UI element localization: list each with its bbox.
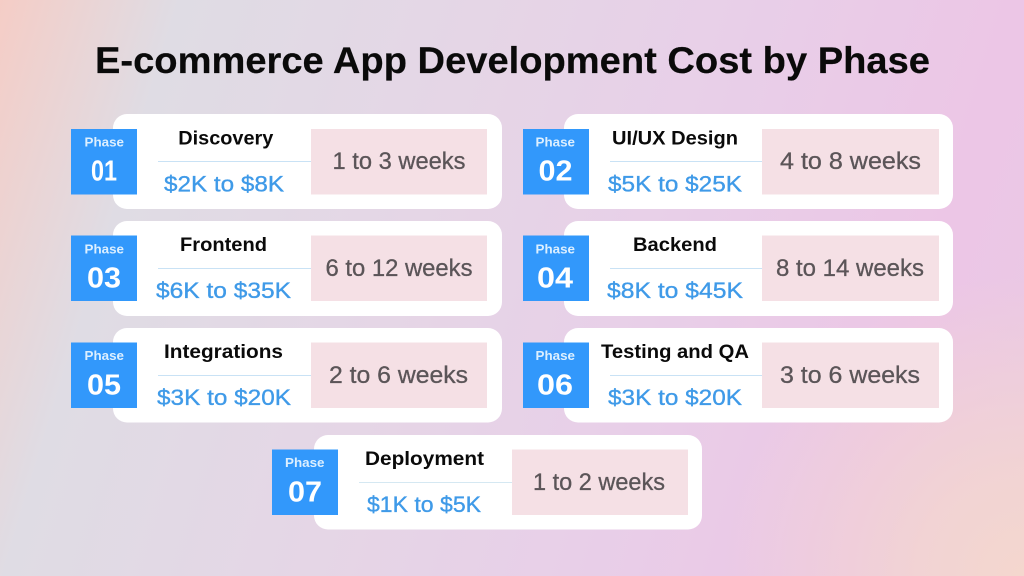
duration box: 2 to 6 weeks	[329, 362, 468, 389]
duration box	[311, 129, 487, 194]
phase name: Testing and QA	[601, 341, 749, 363]
badge: phase 05: 05	[87, 370, 121, 402]
badge: phase 06: Phase	[536, 348, 575, 363]
badge: phase 04: 04	[537, 262, 573, 294]
cost range: $8K to $45K	[607, 278, 743, 303]
duration box	[762, 129, 939, 194]
badge: phase 05	[71, 342, 137, 408]
cost range: $2K to $8K	[164, 172, 284, 196]
badge: phase 07	[272, 450, 338, 515]
duration box	[311, 342, 487, 408]
badge: phase 04: Phase	[536, 241, 575, 256]
badge: phase 01: 01	[91, 156, 117, 188]
duration box	[762, 236, 939, 301]
duration box	[311, 236, 487, 301]
badge: phase 07: Phase	[285, 455, 324, 470]
duration box: 1 to 2 weeks	[533, 469, 665, 496]
phase name: UI/UX Design	[612, 127, 738, 149]
panel: phase 06 testing and qa	[523, 328, 953, 422]
panel: phase 07 deployment	[272, 435, 702, 530]
duration box: 4 to 8 weeks	[780, 148, 921, 175]
phase name: Discovery	[178, 127, 273, 149]
duration box	[512, 450, 688, 515]
panel: phase 05 integrations	[71, 328, 502, 422]
phase name: Frontend	[180, 234, 267, 256]
cost range: $3K to $20K	[157, 385, 291, 410]
badge: phase 06	[523, 342, 589, 408]
panel: phase 03 frontend	[71, 221, 502, 316]
duration box: 8 to 14 weeks	[776, 255, 924, 282]
cost range: $5K to $25K	[608, 172, 742, 196]
cost range: $3K to $20K	[608, 385, 742, 410]
badge: phase 03	[71, 236, 137, 301]
panel: phase 02 ui/ux design	[523, 114, 953, 209]
phase name: Backend	[633, 234, 717, 256]
duration box: 6 to 12 weeks	[326, 255, 472, 282]
badge: phase 03: Phase	[84, 241, 124, 256]
title: E-commerce App Development Cost by Phase	[95, 40, 930, 81]
panel: phase 01 discovery	[71, 114, 502, 209]
badge: phase 02	[523, 129, 589, 194]
badge: phase 07: 07	[288, 476, 322, 508]
badge: phase 03: 03	[87, 262, 121, 294]
badge: phase 04	[523, 236, 589, 301]
badge: phase 05: Phase	[84, 348, 124, 363]
duration box: 3 to 6 weeks	[780, 362, 920, 389]
badge: phase 06: 06	[537, 370, 573, 402]
badge: phase 01: Phase	[84, 134, 124, 149]
cost range: $6K to $35K	[156, 278, 291, 303]
badge: phase 02: Phase	[536, 134, 575, 149]
duration box	[762, 342, 939, 408]
phase name: Deployment	[365, 448, 485, 470]
cost range: $1K to $5K	[367, 492, 481, 517]
phase name: Integrations	[164, 341, 283, 363]
badge: phase 02: 02	[538, 156, 572, 188]
duration box: 1 to 3 weeks	[332, 148, 466, 175]
badge: phase 01	[71, 129, 137, 194]
panel: phase 04 backend	[523, 221, 953, 316]
